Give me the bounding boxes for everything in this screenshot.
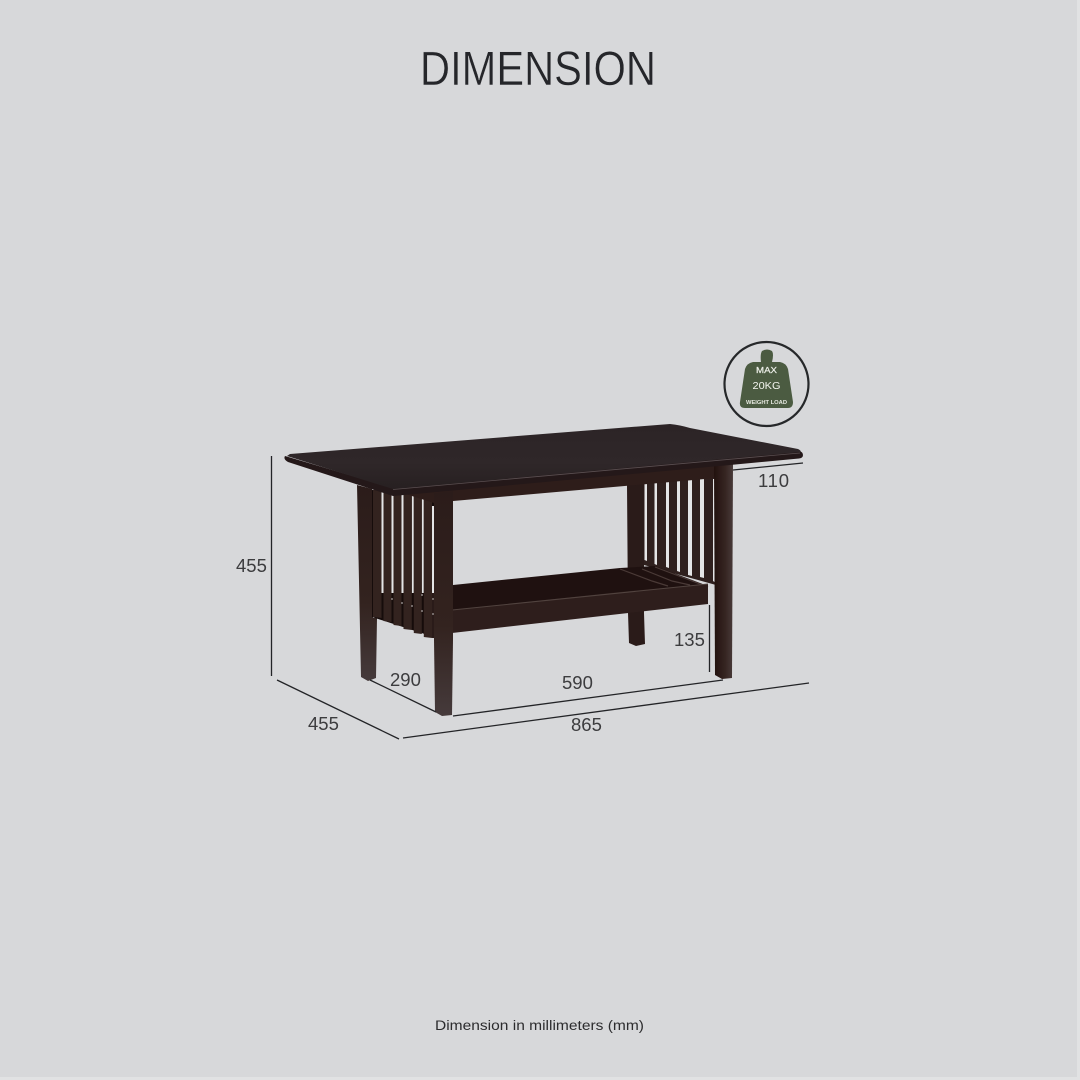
shelf front rail bbox=[452, 584, 708, 633]
left rear leg bbox=[357, 485, 377, 681]
shelf slats right bbox=[620, 567, 708, 587]
front rail highlight bbox=[452, 584, 708, 610]
label: overall height: 455 bbox=[236, 555, 267, 576]
icon: weight bbox=[740, 350, 793, 408]
left slats bbox=[373, 490, 432, 638]
left front leg bbox=[434, 491, 453, 716]
right front leg bbox=[714, 464, 733, 679]
label: overall width: 865 bbox=[571, 714, 602, 735]
label: depth: 455 bbox=[308, 713, 339, 734]
weight load badge bbox=[724, 342, 808, 426]
slat screw dots bbox=[391, 594, 434, 615]
label: inner depth: 290 bbox=[390, 669, 421, 690]
rail stub between leg and slats bbox=[432, 593, 434, 638]
label: overhang: 110 bbox=[758, 470, 789, 491]
dimension lines bbox=[272, 456, 809, 739]
footnote: Dimension in millimeters (mm) bbox=[435, 1018, 644, 1033]
left slat gaps bbox=[382, 492, 434, 594]
weight load badge: WEIGHT LOAD bbox=[746, 400, 787, 406]
tabletop edge highlight bbox=[393, 453, 800, 490]
left slat backing bbox=[372, 490, 434, 637]
weight load badge: 20KG bbox=[752, 380, 780, 392]
weight load badge: MAX bbox=[756, 366, 778, 375]
table illustration bbox=[284, 424, 803, 716]
label: inner width: 590 bbox=[562, 672, 593, 693]
right rear leg bbox=[627, 483, 645, 646]
right slat gaps bbox=[644, 478, 714, 582]
shelf back rail bbox=[453, 566, 708, 614]
title: DIMENSION bbox=[420, 42, 656, 96]
label: clearance: 135 bbox=[674, 629, 705, 650]
right slat panel bbox=[644, 476, 716, 585]
tabletop bbox=[287, 424, 801, 489]
front rail under tabletop bbox=[393, 462, 728, 503]
tabletop edge bbox=[284, 450, 803, 496]
